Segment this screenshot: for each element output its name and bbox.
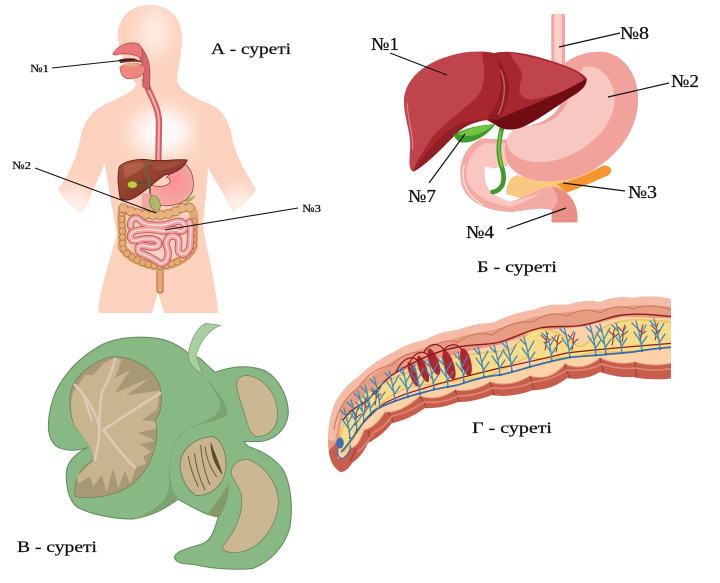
ventral vessel <box>355 343 675 433</box>
label: B №8: №8 <box>620 23 649 43</box>
darker folds <box>133 367 228 519</box>
esophagus <box>145 78 159 161</box>
nerve cord <box>341 347 675 452</box>
caption: V: В - суреті <box>17 539 98 556</box>
gut <box>340 320 675 452</box>
leader line: A №1 <box>52 59 135 68</box>
panel: figure B, liver and stomach <box>371 14 699 276</box>
label: B №4: №4 <box>466 222 494 242</box>
outer green body <box>48 337 291 569</box>
dorsal vessel <box>343 314 675 420</box>
leader line: B №3 <box>563 183 625 191</box>
lower right tan lobe <box>223 459 278 553</box>
digestive organs <box>118 159 196 290</box>
caption: A: А - суреті <box>211 41 292 58</box>
leader line: B №7 <box>429 134 465 183</box>
worm outer body <box>328 296 671 472</box>
upper segment scallops <box>334 306 675 430</box>
caption: B: Б - суреті <box>477 259 558 276</box>
label: B №3: №3 <box>628 182 657 202</box>
large intestine <box>122 207 194 290</box>
lower muscular band <box>340 372 675 472</box>
upper right tan lobe <box>237 376 277 437</box>
label: A №1: №1 <box>30 63 49 75</box>
body silhouette <box>56 5 258 313</box>
hearts <box>408 348 472 386</box>
bile duct <box>493 129 504 192</box>
liver <box>118 159 187 200</box>
lower segment lines <box>350 358 637 462</box>
pancreas tip <box>185 195 196 203</box>
red gut twigs <box>351 323 661 425</box>
pancreas <box>506 166 611 208</box>
large tan lobe <box>70 357 161 497</box>
leader line: B №8 <box>559 33 620 47</box>
label: A №2: №2 <box>12 160 31 172</box>
esophagus <box>551 14 565 71</box>
centre striped lobe <box>180 437 226 496</box>
small intestine <box>130 218 191 264</box>
leader line: B №1 <box>390 53 447 75</box>
label: B №2: №2 <box>671 71 699 91</box>
label: B №7: №7 <box>408 186 436 206</box>
leader line: B №4 <box>507 208 566 229</box>
panel: figure G, earthworm anatomy <box>328 296 671 472</box>
upper pale rim <box>328 298 675 440</box>
panel: figure A, human digestive system <box>12 5 322 313</box>
label: B №1: №1 <box>371 34 399 54</box>
leader line: A №2 <box>35 168 156 213</box>
mouth and throat <box>113 43 150 90</box>
stomach <box>505 52 638 181</box>
panel: figure V, green organ cross-section <box>17 323 291 569</box>
caption: G: Г - суреті <box>472 420 553 437</box>
head ganglion <box>336 438 350 458</box>
heart arches <box>396 344 462 372</box>
stalk <box>188 323 221 375</box>
duodenum <box>460 138 578 222</box>
lower band highlight <box>358 364 675 452</box>
stomach <box>150 162 193 206</box>
liver <box>404 52 587 172</box>
leader line: B №2 <box>608 83 669 97</box>
nerve branches <box>340 319 665 439</box>
label: A №3: №3 <box>302 203 322 215</box>
leader line: A №3 <box>165 208 298 230</box>
duodenum piece <box>142 193 152 210</box>
gallbladder <box>453 124 496 143</box>
inner peach cavity <box>338 316 675 458</box>
gallbladder sac <box>148 194 162 212</box>
